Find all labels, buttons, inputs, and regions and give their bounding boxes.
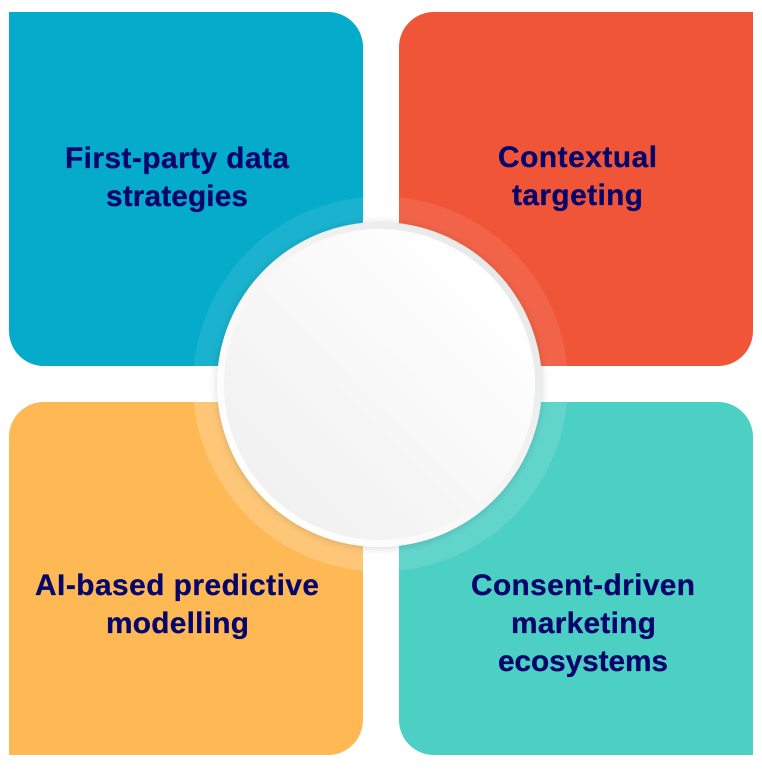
heading: consent-driven marketing ecosystems: ecosystems [498,645,668,678]
central circle [217,222,542,547]
panel: first-party data strategies [9,12,363,366]
translucent ring around the central circle [193,196,568,572]
heading: AI-based predictive modelling: AI-based predictive [35,569,319,602]
heading: first-party data strategies [65,142,289,213]
heading: contextual targeting: Contextual [498,141,657,174]
heading: AI-based predictive modelling: modelling [106,607,249,640]
heading: contextual targeting [498,141,657,212]
heading: AI-based predictive modelling [35,569,319,640]
panel: consent-driven marketing ecosystems [399,402,753,755]
heading: consent-driven marketing ecosystems: marketing [511,607,656,640]
heading: consent-driven marketing ecosystems: Consent-driven [471,569,695,602]
heading: contextual targeting: targeting [512,179,643,212]
panel: AI-based predictive modelling [9,402,363,755]
heading: consent-driven marketing ecosystems [471,569,695,678]
panel: contextual targeting [399,12,753,366]
heading: first-party data strategies: First-party data [65,142,289,175]
heading: first-party data strategies: strategies [106,180,248,213]
